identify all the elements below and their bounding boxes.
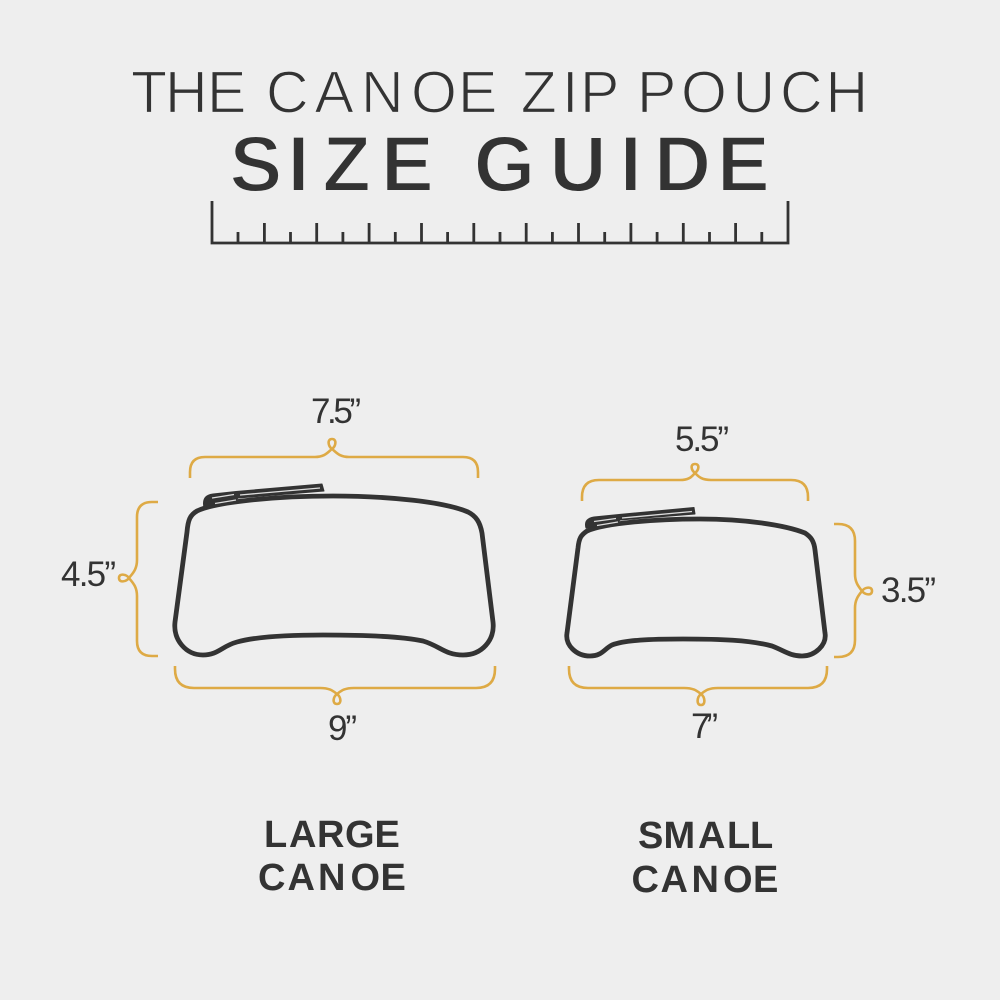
label: large canoe xyxy=(258,814,406,899)
icon: small zipper pull xyxy=(585,508,695,528)
bracket: large top width xyxy=(190,439,478,478)
label: 5.5 inches: 5.5” xyxy=(675,420,729,459)
label: large canoe: CANOE xyxy=(258,857,406,899)
icon: small pouch outline xyxy=(567,519,825,656)
icon: ruler xyxy=(212,201,788,243)
label: 9 inches: 9” xyxy=(328,709,357,748)
label: 4.5 inches: 4.5” xyxy=(61,555,116,594)
icon: large pouch outline xyxy=(175,496,493,655)
label: 3.5 inches: 3.5” xyxy=(881,571,936,610)
label: small canoe: SMALL xyxy=(638,815,773,857)
label: small canoe: CANOE xyxy=(632,859,778,901)
label: 7 inches: 7” xyxy=(691,707,718,746)
title: THE CANOE ZIP POUCH xyxy=(131,60,868,126)
bracket: small height xyxy=(834,524,872,657)
bracket: large height xyxy=(119,502,158,656)
label: large canoe: LARGE xyxy=(264,814,400,856)
icon: large zipper pull xyxy=(203,484,324,508)
panel: large canoe xyxy=(61,392,495,899)
heading: size guide: SIZE GUIDE xyxy=(230,119,770,208)
label: small canoe xyxy=(632,815,778,901)
label: 7.5 inches: 7.5” xyxy=(311,392,361,431)
bracket: small bottom width xyxy=(569,666,827,705)
bracket: small top width xyxy=(582,464,808,501)
bracket: large bottom width xyxy=(175,666,495,704)
panel: small canoe xyxy=(567,420,936,901)
